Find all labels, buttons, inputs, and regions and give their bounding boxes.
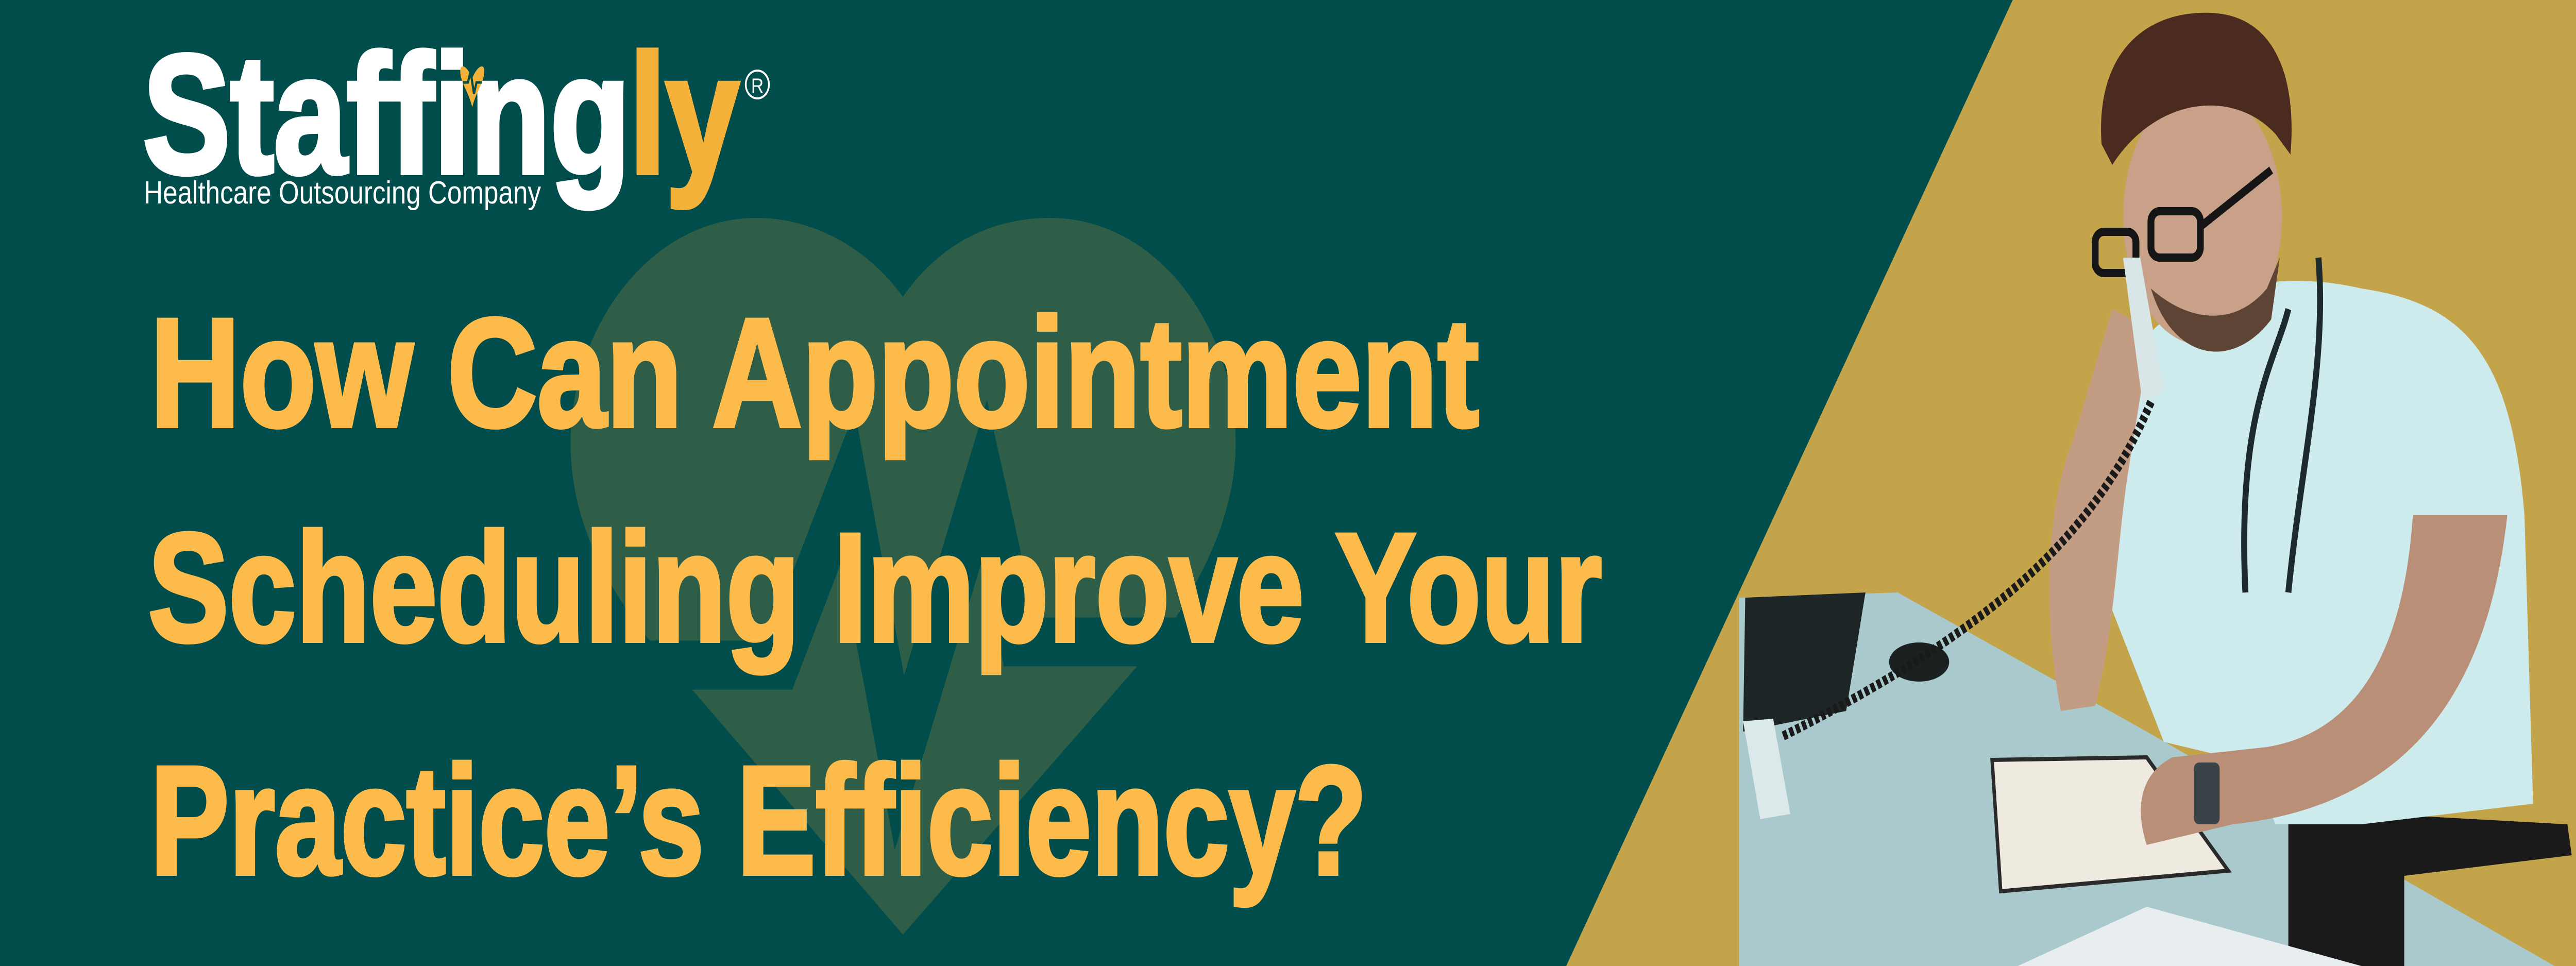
chair — [2289, 809, 2572, 966]
beard — [2151, 258, 2280, 351]
notebook — [1992, 757, 2228, 891]
registered mark: R — [751, 74, 764, 97]
title: Scheduling Improve Your — [148, 501, 1602, 675]
logo: Staffingly: Staffing — [143, 20, 630, 210]
icon: background heart with pulse — [515, 218, 1288, 935]
icon: small heart pulse on i — [460, 66, 484, 107]
logo: Staffingly: ly — [630, 20, 740, 210]
papers — [2018, 907, 2361, 966]
gold diagonal panel — [1566, 0, 2576, 966]
hair — [2101, 13, 2292, 165]
title — [148, 286, 1602, 908]
title: Practice’s Efficiency? — [150, 734, 1367, 908]
torso shirt — [2095, 281, 2533, 824]
keyboard — [1743, 592, 1866, 732]
mouse — [1889, 642, 1949, 682]
glasses — [2095, 170, 2271, 273]
phone handset — [2123, 258, 2164, 402]
phone cord — [1782, 402, 2151, 737]
registered mark — [746, 71, 769, 98]
logo tagline: Healthcare Outsourcing Company — [144, 175, 541, 211]
raised arm — [2049, 309, 2151, 711]
title: How Can Appointment — [150, 286, 1479, 460]
desk — [1739, 592, 2554, 966]
writing arm — [2141, 515, 2507, 845]
stethoscope — [2244, 258, 2320, 592]
watch — [2194, 762, 2219, 824]
phone base — [1743, 719, 1790, 819]
head — [2123, 88, 2282, 345]
photo: doctor on phone at desk — [1739, 13, 2572, 966]
